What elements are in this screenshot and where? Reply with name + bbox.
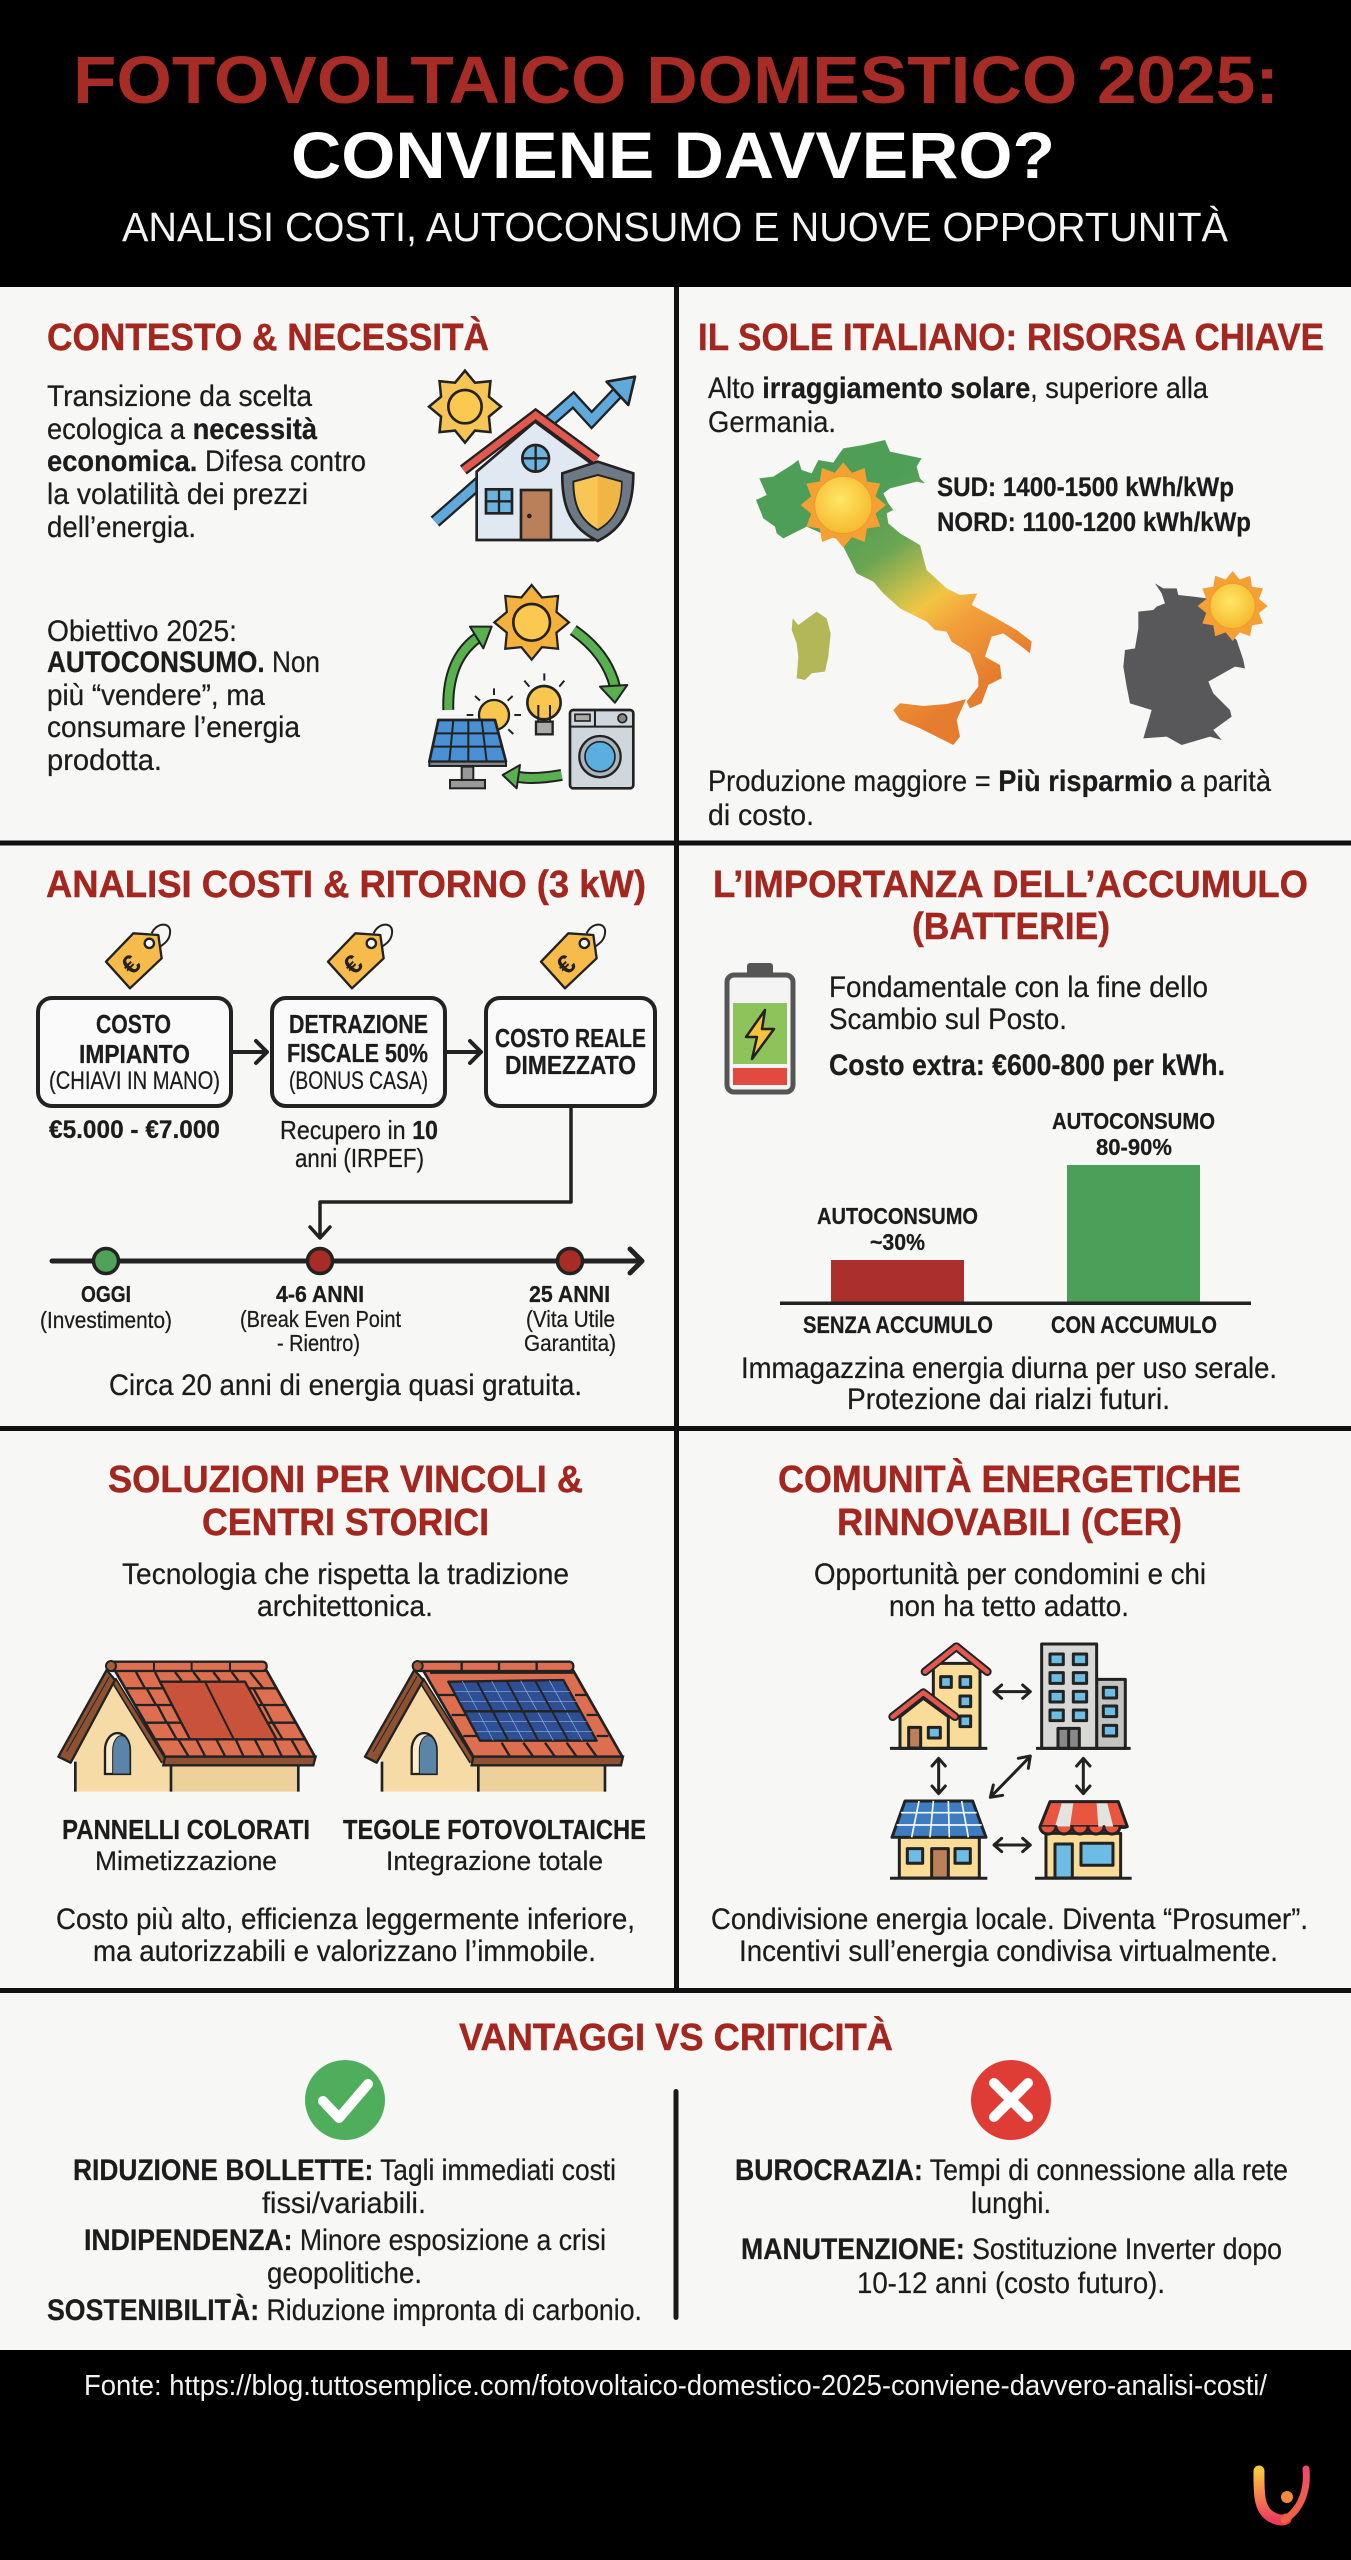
text block: tecnologia: [122, 1558, 569, 1623]
text block: vantaggi: fissi/variabili.: [262, 2187, 426, 2220]
heading: cer: [778, 1457, 1241, 1544]
label: pannelli colorati: [62, 1814, 310, 1876]
text block: più risparmio: di costo.: [708, 799, 814, 832]
text block: immagazzina: Protezione dai rialzi futuri.: [847, 1383, 1170, 1416]
timeline label: 4-6 anni: [240, 1281, 402, 1356]
text block: irraggiamento: Germania.: [708, 406, 836, 439]
heading: accumulo: L’IMPORTANZA DELL’ACCUMULO: [713, 864, 1308, 906]
text block: scambio sul posto: Scambio sul Posto.: [829, 1003, 1067, 1036]
bar label: 30%: [817, 1203, 978, 1255]
text block: opportunità: [814, 1558, 1206, 1623]
text block: opportunità: Opportunità per condomini e chi: [814, 1558, 1206, 1591]
text block: obiettivo 2025: Obiettivo 2025:: [47, 615, 237, 648]
icon: price tag 2: [328, 925, 392, 988]
heading: soluzioni: SOLUZIONI PER VINCOLI &: [108, 1459, 583, 1501]
building: houses: [890, 1647, 987, 1748]
bar chart: autoconsumo: [780, 1108, 1251, 1339]
bar label: 30%: AUTOCONSUMO: [817, 1203, 978, 1229]
box: costo impianto: IMPIANTO: [79, 1039, 190, 1069]
panel: il sole italiano: [678, 287, 1351, 841]
timeline label: 25 anni: Garantita): [524, 1330, 616, 1356]
building: solar house: [890, 1801, 987, 1878]
data labels: irradiation: SUD: 1400-1500 kWh/kWp: [937, 472, 1234, 502]
box: costo impianto: COSTO: [96, 1009, 171, 1039]
icon: energy community network: [890, 1644, 1132, 1878]
marker: oggi: [94, 1248, 118, 1274]
building: shop: [1035, 1802, 1132, 1878]
text block: irraggiamento: [708, 372, 1208, 439]
text block: transizione: dell’energia.: [47, 511, 196, 544]
heading: accumulo: (BATTERIE): [912, 906, 1110, 948]
illustration: roof with coloured panels: [58, 1661, 316, 1792]
text block: più risparmio: Produzione maggiore = Più risparmio a parità: [708, 765, 1271, 798]
text block: obiettivo 2025: più “vendere”, ma: [47, 679, 265, 712]
text block: più risparmio: [708, 765, 1271, 832]
text block: obiettivo 2025: consumare l’energia: [47, 711, 300, 744]
label: recupero: [280, 1115, 438, 1173]
data labels: irradiation: NORD: 1100-1200 kWh/kWp: [937, 507, 1251, 537]
title line 1: FOTOVOLTAICO DOMESTICO 2025:: [73, 43, 1279, 118]
heading: soluzioni: CENTRI STORICI: [202, 1502, 489, 1544]
icon: price tag 1: [106, 925, 170, 988]
timeline: [52, 1248, 642, 1274]
marker: 25 anni: [558, 1248, 582, 1274]
heading: accumulo: [713, 864, 1308, 948]
illustration: roof with photovoltaic tiles: [365, 1661, 623, 1792]
text block: obiettivo 2025: prodotta.: [47, 744, 162, 777]
arrow: detrazione to costo reale: [445, 1041, 481, 1063]
arrow: impianto to detrazione: [231, 1041, 267, 1063]
footer: source: Fonte: https://blog.tuttosemplice.com/fotovoltaico-domestico-2025-conviene-davvero-analisi-costi/: [84, 2370, 1268, 2402]
arrow: connector to break even: [310, 1106, 571, 1238]
text block: condivisione: Condivisione energia locale. Diventa “Prosumer”.: [711, 1903, 1308, 1936]
text block: immagazzina: [741, 1352, 1277, 1416]
text block: vantaggi: INDIPENDENZA: Minore esposizione a crisi: [84, 2224, 606, 2257]
text block: costo più alto: ma autorizzabili e valorizzano l’immobile.: [93, 1935, 596, 1968]
text block: scambio sul posto: Fondamentale con la fine dello: [829, 971, 1208, 1004]
box: detrazione fiscale: DETRAZIONE: [289, 1009, 428, 1039]
timeline label: oggi: OGGI: [81, 1281, 131, 1307]
text block: scambio sul posto: [829, 971, 1225, 1082]
text block: criticità: lunghi.: [971, 2187, 1051, 2220]
icon: cross: [971, 2060, 1051, 2140]
box: detrazione fiscale: (BONUS CASA): [289, 1067, 428, 1095]
timeline label: oggi: [40, 1281, 172, 1333]
icon: self-consumption cycle: [429, 585, 633, 788]
timeline label: 4-6 anni: 4-6 ANNI: [276, 1281, 364, 1307]
heading: vantaggi: VANTAGGI VS CRITICITÀ: [459, 2015, 893, 2059]
icon: battery: [727, 963, 793, 1092]
subtitle: ANALISI COSTI, AUTOCONSUMO E NUOVE OPPORTUNITÀ: [122, 204, 1229, 250]
text block: transizione: Transizione da scelta: [47, 380, 312, 413]
panel: analisi costi e ritorno: [0, 845, 675, 1427]
label: pannelli colorati: Mimetizzazione: [95, 1846, 277, 1876]
text block: vantaggi: geopolitiche.: [267, 2257, 422, 2290]
text block: immagazzina: Immagazzina energia diurna per uso serale.: [741, 1352, 1277, 1385]
axis label: con accumulo: CON ACCUMULO: [1051, 1312, 1217, 1339]
icon: check: [305, 2060, 385, 2140]
text block: costo più alto: [56, 1903, 635, 1968]
timeline label: oggi: (Investimento): [40, 1307, 172, 1333]
text block: tecnologia: architettonica.: [257, 1590, 433, 1623]
conclusion text: Circa 20 anni di energia quasi gratuita.: [109, 1369, 582, 1402]
box: costo reale dimezzato: [486, 998, 655, 1106]
box: costo reale dimezzato: COSTO REALE: [495, 1023, 646, 1053]
icon: house with sun, rising arrow and shield: [429, 371, 635, 541]
header band: [0, 0, 1351, 287]
bar label: 80-90%: [1052, 1108, 1215, 1160]
text block: condivisione: [711, 1903, 1308, 1968]
text block: vantaggi: [47, 2154, 642, 2327]
label: prezzo: €5.000 - €7.000: [49, 1116, 220, 1144]
heading: cer: RINNOVABILI (CER): [837, 1502, 1182, 1544]
box: detrazione fiscale: [272, 998, 445, 1106]
title line 2: CONVIENE DAVVERO?: [291, 118, 1055, 192]
building: offices: [1036, 1644, 1131, 1748]
text block: opportunità: non ha tetto adatto.: [889, 1590, 1129, 1623]
text block: criticità: 10-12 anni (costo futuro).: [857, 2267, 1165, 2300]
dividers: [0, 287, 1351, 1993]
label: recupero: anni (IRPEF): [295, 1143, 424, 1173]
footer: source: [0, 2350, 1351, 2560]
panel: comunità energetiche: [678, 1431, 1351, 1989]
text block: vantaggi: RIDUZIONE BOLLETTE: Tagli immediati costi: [73, 2154, 616, 2187]
label: tegole fotovoltaiche: [343, 1814, 646, 1876]
box: costo reale dimezzato: DIMEZZATO: [505, 1050, 636, 1080]
text block: transizione: la volatilità dei prezzi: [47, 478, 308, 511]
bar: con accumulo: [1067, 1165, 1200, 1303]
text block: tecnologia: Tecnologia che rispetta la tradizione: [122, 1558, 569, 1591]
text block: condivisione: Incentivi sull’energia condivisa virtualmente.: [739, 1935, 1278, 1968]
bar: senza accumulo: [831, 1260, 964, 1303]
heading: cer: COMUNITÀ ENERGETICHE: [778, 1457, 1241, 1501]
label: tegole fotovoltaiche: TEGOLE FOTOVOLTAICHE: [343, 1814, 646, 1845]
panel: vantaggi vs criticità: [0, 1993, 1351, 2350]
label: pannelli colorati: PANNELLI COLORATI: [62, 1814, 310, 1845]
text block: obiettivo 2025: [47, 615, 320, 777]
timeline label: 25 anni: (Vita Utile: [526, 1306, 615, 1332]
heading: contesto: CONTESTO & NECESSITÀ: [47, 315, 489, 359]
timeline label: 4-6 anni: - Rientro): [277, 1330, 360, 1356]
icon: price tag 3: [541, 925, 605, 988]
heading: soluzioni: [108, 1459, 583, 1544]
panel: contesto e necessità: [0, 287, 675, 841]
marker: break even: [308, 1248, 332, 1274]
box: detrazione fiscale: FISCALE 50%: [287, 1038, 428, 1068]
text block: criticità: [735, 2154, 1288, 2300]
panel: importanza dell'accumulo: [678, 845, 1351, 1427]
text block: transizione: economica. Difesa contro: [47, 445, 366, 478]
icon: price tag 1: €: [115, 949, 147, 981]
text block: transizione: ecologica a necessità: [47, 413, 317, 446]
timeline label: 4-6 anni: (Break Even Point: [240, 1306, 402, 1332]
map: Germany with sun: [1123, 571, 1268, 745]
text block: transizione: [47, 380, 366, 544]
heading: analisi costi: ANALISI COSTI & RITORNO (3 kW): [46, 864, 646, 906]
icon: price tag 3: €: [550, 949, 582, 981]
text block: scambio sul posto: Costo extra: €600-800 per kWh.: [829, 1049, 1225, 1082]
text block: obiettivo 2025: AUTOCONSUMO. Non: [47, 646, 320, 679]
text block: criticità: MANUTENZIONE: Sostituzione Inverter dopo: [741, 2233, 1282, 2266]
panel: soluzioni per vincoli: [0, 1431, 675, 1989]
text block: costo più alto: Costo più alto, efficienza leggermente inferiore,: [56, 1903, 635, 1936]
timeline label: 25 anni: [524, 1281, 616, 1356]
text block: criticità: BUROCRAZIA: Tempi di connessione alla rete: [735, 2154, 1288, 2187]
box: costo impianto: (CHIAVI IN MANO): [49, 1067, 220, 1095]
axis label: senza accumulo: SENZA ACCUMULO: [803, 1312, 993, 1339]
icon: price tag 2: €: [337, 949, 369, 981]
map: Italy with sun: [756, 440, 1032, 745]
arrows: energy exchange: [932, 1685, 1090, 1852]
text block: irraggiamento: Alto irraggiamento solare, superiore alla: [708, 372, 1208, 405]
data labels: irradiation: [937, 472, 1251, 537]
label: recupero: Recupero in 10: [280, 1115, 438, 1145]
text block: vantaggi: SOSTENIBILITÀ: Riduzione impronta di carbonio.: [47, 2293, 642, 2327]
logo: [1259, 2469, 1306, 2520]
bar label: 80-90%: AUTOCONSUMO: [1052, 1108, 1215, 1134]
bar label: 80-90%: 80-90%: [1096, 1134, 1172, 1160]
timeline label: 25 anni: 25 ANNI: [529, 1281, 610, 1307]
box: costo impianto: [38, 998, 231, 1106]
bar label: 30%: ~30%: [870, 1229, 925, 1255]
label: tegole fotovoltaiche: Integrazione totale: [386, 1846, 603, 1876]
